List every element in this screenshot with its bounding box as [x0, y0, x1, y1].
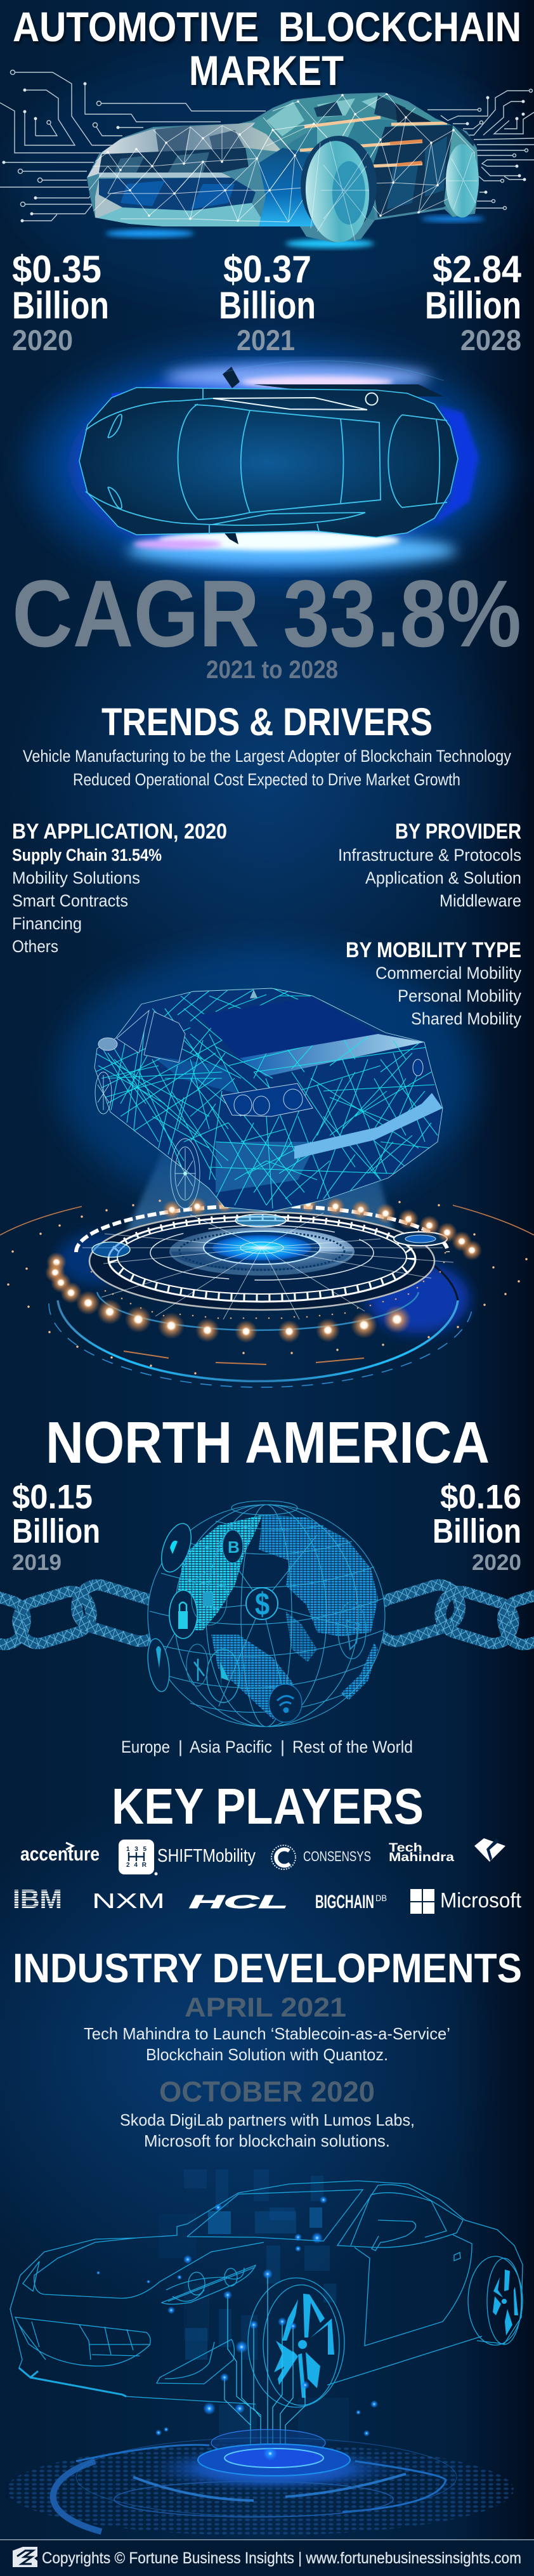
heading: north america: NORTH AMERICA	[46, 1409, 490, 1475]
stat: north america 2020: $0.16	[440, 1478, 521, 1516]
segment list: by provider: Application & Solution	[365, 868, 521, 887]
segment list: by provider: Middleware	[440, 891, 521, 910]
region list: Asia Pacific	[190, 1737, 272, 1756]
illustration: circuit traces and sparks	[96, 2196, 378, 2449]
globe grid	[148, 1501, 385, 1727]
illustration: digital globe	[145, 1501, 385, 1727]
icon: aeroplane node	[207, 1649, 240, 1703]
glowing orange lights	[45, 1194, 482, 1343]
radial spokes	[82, 1213, 453, 1319]
logo: ConsenSys: CONSENSYS	[303, 1848, 371, 1864]
segment list: by application: Supply Chain 31.54%	[12, 846, 162, 865]
icon: bitcoin node	[223, 1530, 243, 1563]
wheels	[95, 1072, 200, 1208]
segment list: by provider	[338, 820, 521, 910]
illustration: light beam and hologram platform	[0, 945, 534, 1387]
development: October 2020: Skoda DigiLab partners with Lumos Labs,	[120, 2110, 415, 2129]
development: April 2021: APRIL 2021	[185, 1992, 346, 2023]
section: trends and drivers	[23, 700, 511, 789]
icon: padlock node	[169, 1590, 197, 1638]
illustration: top view car with blue glow	[27, 343, 509, 590]
illustration: blockchain links right	[370, 1580, 534, 1649]
illustration: holographic floor	[6, 2429, 514, 2535]
region list: Europe	[121, 1737, 170, 1756]
stat: north america 2019	[12, 1478, 100, 1575]
segment list: by provider: Infrastructure & Protocols	[338, 846, 521, 865]
icon: shield node	[338, 1602, 366, 1659]
logo: BigchainDB: DB	[375, 1893, 387, 1903]
platform discs	[89, 1212, 434, 1310]
icon: Fortune Business Insights mark	[13, 2547, 37, 2567]
region list: |	[178, 1737, 183, 1756]
development: April 2021	[84, 1992, 450, 2064]
icon: tag node	[186, 1644, 208, 1686]
icon: circuit lines around the top car	[0, 70, 534, 221]
stat: 2020 market size: Billion	[12, 284, 109, 327]
logo: Microsoft: Microsoft	[440, 1888, 521, 1912]
logo: SHIFT Mobility: SHIFTMobility	[157, 1846, 256, 1866]
heading: key players: KEY PLAYERS	[112, 1778, 424, 1834]
region list: |	[280, 1737, 285, 1756]
logo: diamond	[474, 1838, 505, 1862]
stat: 2021 market size: $0.37	[223, 248, 311, 291]
illustration: wireframe rear view car	[94, 988, 443, 1212]
roof fin	[250, 990, 257, 998]
logo: Microsoft	[410, 1888, 521, 1914]
side windows	[117, 1010, 185, 1062]
development: April 2021: Tech Mahindra to Launch ‘Stablecoin-as-a-Service’	[84, 2024, 450, 2043]
stat: 2028 market size: $2.84	[433, 248, 522, 291]
segment list: by application: Smart Contracts	[12, 891, 128, 910]
front wheel	[301, 136, 377, 244]
logo: Tech Mahindra	[389, 1841, 455, 1864]
logo: accenture: accenture	[20, 1843, 100, 1865]
region list: Rest of the World	[292, 1737, 413, 1756]
mirror	[98, 1038, 117, 1050]
logo: NXM: NXM	[92, 1889, 165, 1912]
stat: 2028 market size: 2028	[460, 324, 521, 356]
CAGR: 2021 to 2028	[206, 656, 338, 684]
ring of small dots	[8, 1201, 526, 1373]
illustration: wireframe sports car	[10, 2181, 523, 2407]
segment list: by application	[12, 820, 227, 956]
segment list: by application: BY APPLICATION, 2020	[12, 820, 227, 844]
stat: 2020 market size: 2020	[12, 324, 73, 356]
title: MARKET	[189, 47, 344, 94]
illustration: blockchain links left	[0, 1580, 167, 1649]
stat: 2021 market size	[219, 248, 316, 356]
icon: rear wheel blades	[493, 2270, 518, 2336]
segment list: by mobility type	[346, 938, 521, 1028]
icon: chip node	[192, 1572, 227, 1625]
icon: bitcoin node: B	[228, 1538, 240, 1557]
rear wheel	[446, 144, 479, 218]
title	[13, 3, 521, 94]
logo: SHIFT Mobility: 135	[126, 1846, 147, 1853]
stat: 2020 market size: $0.35	[12, 248, 101, 291]
stat: north america 2020	[433, 1478, 521, 1575]
outer dashed and glowing rings	[49, 1304, 472, 1387]
illustration: digital pixel blocks	[159, 2169, 349, 2442]
icon: location node	[156, 1520, 197, 1576]
segment list: by application: Others	[12, 937, 58, 956]
rear bumper band	[294, 1093, 443, 1159]
stat: north america 2020: 2020	[472, 1550, 521, 1575]
stat: 2028 market size	[425, 248, 522, 356]
logo: Tech Mahindra: Tech	[389, 1841, 422, 1855]
icon: location pin node	[145, 1637, 173, 1693]
segment list: by application: Mobility Solutions	[12, 868, 140, 887]
tail lights	[222, 1059, 423, 1116]
logo: ConsenSys	[271, 1845, 371, 1869]
logo: IBM: IBM	[13, 1884, 62, 1914]
stat: 2021 market size: 2021	[237, 324, 295, 356]
title: AUTOMOTIVE	[13, 3, 259, 50]
car lower lip highlight	[19, 2368, 126, 2396]
illustration: polygon mesh car	[87, 93, 485, 248]
development: October 2020: OCTOBER 2020	[159, 2076, 375, 2108]
logo: SHIFT Mobility: 24R	[126, 1862, 147, 1869]
segment list: by mobility type: Commercial Mobility	[375, 964, 521, 983]
segment list: by mobility type: Personal Mobility	[398, 986, 521, 1005]
logo: BigchainDB: BIGCHAIN	[315, 1892, 374, 1912]
development: October 2020: Microsoft for blockchain solutions.	[144, 2131, 390, 2150]
icon: front wheel blades	[274, 2294, 334, 2398]
development: April 2021: Blockchain Solution with Quantoz.	[146, 2045, 388, 2064]
segment list: by mobility type: Shared Mobility	[411, 1009, 521, 1028]
logo: HCL: HCL	[189, 1892, 288, 1912]
region list	[121, 1737, 413, 1756]
dotted continents	[175, 1515, 263, 1630]
icon: dollar node: $	[255, 1586, 270, 1622]
logo: SHIFT Mobility	[119, 1840, 256, 1875]
segment list: by application: Financing	[12, 914, 82, 933]
stat: 2020 market size	[12, 248, 109, 356]
icon: dollar node	[246, 1586, 278, 1622]
footer	[0, 2539, 534, 2576]
stat: north america 2019: 2019	[12, 1550, 62, 1575]
section: trends and drivers: Reduced Operational Cost Expected to Drive Market Growth	[73, 770, 460, 789]
small hologram discs	[235, 1214, 286, 1227]
stat: north america 2019: Billion	[12, 1512, 100, 1550]
stat: north america 2019: $0.15	[12, 1478, 93, 1516]
stat: 2021 market size: Billion	[219, 284, 316, 327]
development: October 2020	[120, 2076, 415, 2150]
icon: wifi node	[269, 1684, 302, 1722]
logo: Tech Mahindra: Mahindra	[389, 1851, 455, 1864]
section: trends and drivers: TRENDS & DRIVERS	[101, 700, 433, 743]
